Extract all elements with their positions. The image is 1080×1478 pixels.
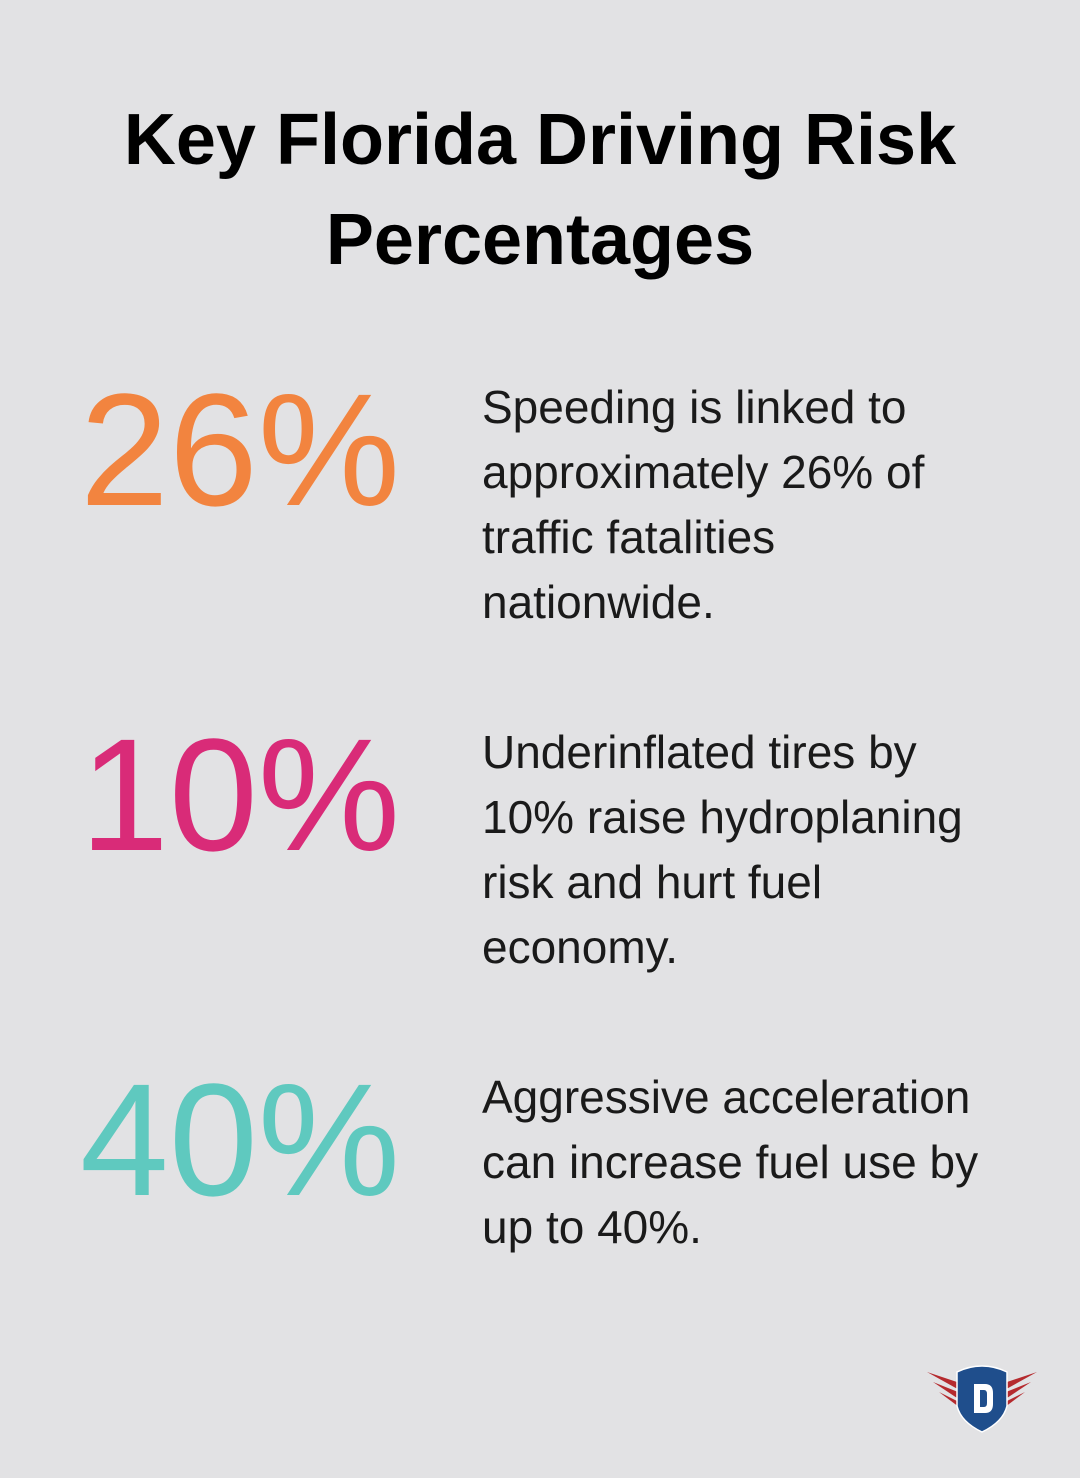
title: Key Florida Driving Risk xyxy=(124,100,956,180)
text: acceleration: can increase fuel use by xyxy=(482,1136,978,1188)
text: tires: 10% raise hydroplaning xyxy=(482,791,963,843)
text: tires: economy. xyxy=(482,921,678,973)
title: Percentages xyxy=(326,200,754,280)
text: tires xyxy=(482,726,963,973)
row: acceleration xyxy=(80,1050,978,1253)
stat: 10%: 10% xyxy=(80,705,400,884)
text: speeding: approximately 26% of xyxy=(482,446,924,498)
text: speeding xyxy=(482,381,924,628)
icon: logo shield xyxy=(927,1365,1037,1433)
text: speeding: nationwide. xyxy=(482,576,715,628)
text: acceleration: Aggressive acceleration xyxy=(482,1071,970,1123)
text: acceleration: up to 40%. xyxy=(482,1201,702,1253)
text: acceleration xyxy=(482,1071,978,1253)
stat: 40%: 40% xyxy=(80,1050,400,1229)
title xyxy=(124,100,956,280)
row: speeding xyxy=(80,360,924,628)
text: speeding: traffic fatalities xyxy=(482,511,775,563)
stat: 26%: 26% xyxy=(80,360,400,539)
text: tires: Underinflated tires by xyxy=(482,726,917,778)
text: speeding: Speeding is linked to xyxy=(482,381,907,433)
text: tires: risk and hurt fuel xyxy=(482,856,822,908)
row: tires xyxy=(80,705,963,973)
